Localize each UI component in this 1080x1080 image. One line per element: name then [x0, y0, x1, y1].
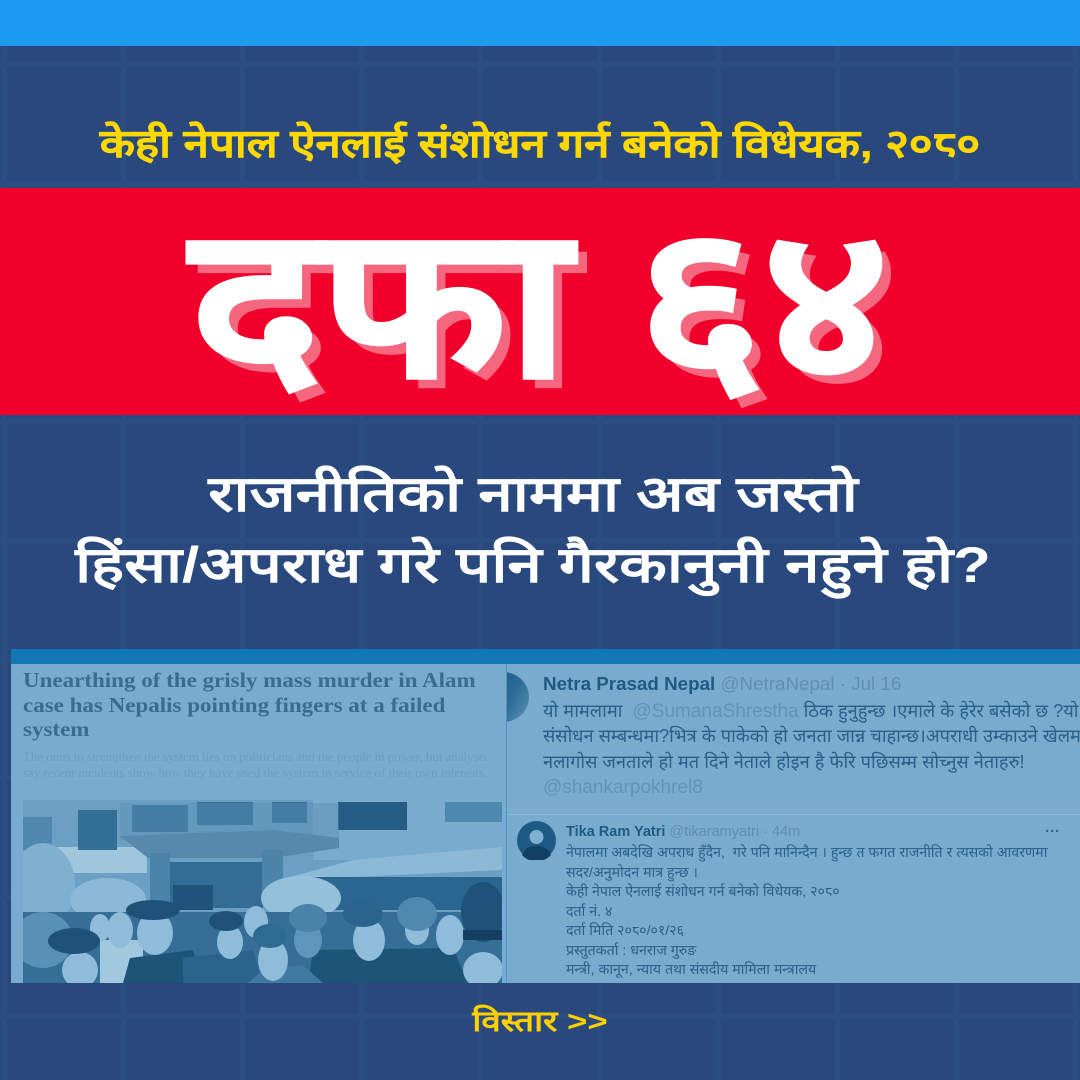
title: section 64: दफा ६४ [191, 187, 889, 420]
avatar [477, 672, 529, 722]
tweet divider [507, 814, 1080, 815]
link: read more: विस्तार >> [472, 1006, 608, 1038]
tweet body: @shankarpokhrel8 [543, 777, 703, 798]
news headline: case has Nepalis pointing fingers at a failed [23, 692, 445, 716]
tweet body: संसोधन सम्बन्धमा?भित्र के पाकेको हो जनता जान्न चाहान्छ।अपराधी उम्काउने खेलमा [543, 726, 1080, 746]
top bar [0, 0, 1080, 46]
panel header bar [11, 649, 1080, 664]
news photo [23, 800, 502, 983]
news standfirst: say recent incidents show how they have used the system in service of their own interests. [23, 766, 487, 780]
tweet body [566, 844, 1048, 978]
tweet body: यो मामलामा @SumanaShrestha ठिक हुनुहुन्छ ।एमाले के हेरेर बसेको छ ?यो [543, 701, 1079, 722]
news headline: system [23, 717, 89, 741]
news standfirst: The onus to strengthen the system lies on politicians and the people in power, but analysts [23, 750, 487, 764]
tweet body: सदर/अनुमोदन मात्र हुन्छ । [566, 864, 698, 880]
news standfirst [23, 750, 487, 780]
tweet body [543, 700, 1080, 798]
news headline: Unearthing of the grisly mass murder in Alam [23, 668, 476, 692]
red banner [0, 188, 1080, 415]
tweet: Tika Ram Yatri [517, 821, 1060, 978]
tweet body: दर्ता मिति २०८०/०१/२६ [566, 923, 684, 939]
question text [74, 465, 991, 599]
divider [506, 664, 507, 983]
tweet body: प्रस्तुतकर्ता : धनराज गुरुङ [566, 942, 696, 958]
tweet author line: Netra Prasad Nepal @NetraNepal · Jul 16 [543, 673, 901, 694]
question text: राजनीतिको नाममा अब जस्तो [208, 466, 858, 522]
question text: हिंसा/अपराध गरे पनि गैरकानुनी नहुने हो? [75, 537, 991, 593]
tweet author line: Tika Ram Yatri @tikaramyatri · 44m [566, 824, 800, 840]
tweet body: मन्त्री, कानून, न्याय तथा संसदीय मामिला मन्त्रालय [566, 962, 816, 978]
panel: screenshots [11, 649, 1080, 983]
tweet body: नलागोस जनताले हो मत दिने नेताले होइन है फेरि पछिसम्म सोच्नुस नेताहरु! [543, 752, 1025, 772]
tweet body: दर्ता नं. ४ [566, 904, 612, 920]
tweet: Netra Prasad Nepal [507, 672, 1080, 798]
tweet body: केही नेपाल ऐनलाई संशोधन गर्न बनेको विधेयक, २०८० [566, 884, 840, 900]
heading: bill name: केही नेपाल ऐनलाई संशोधन गर्न बनेको विधेयक, २०८० [100, 123, 980, 166]
tweet body: नेपालमा अबदेखि अपराध हुँदैन, गरे पनि मानिन्दैन । हुन्छ त फगत राजनीति र त्यसको आवरणमा [566, 845, 1047, 861]
tweet menu: ··· [1045, 823, 1060, 840]
avatar [517, 821, 556, 860]
news headline [23, 668, 476, 741]
